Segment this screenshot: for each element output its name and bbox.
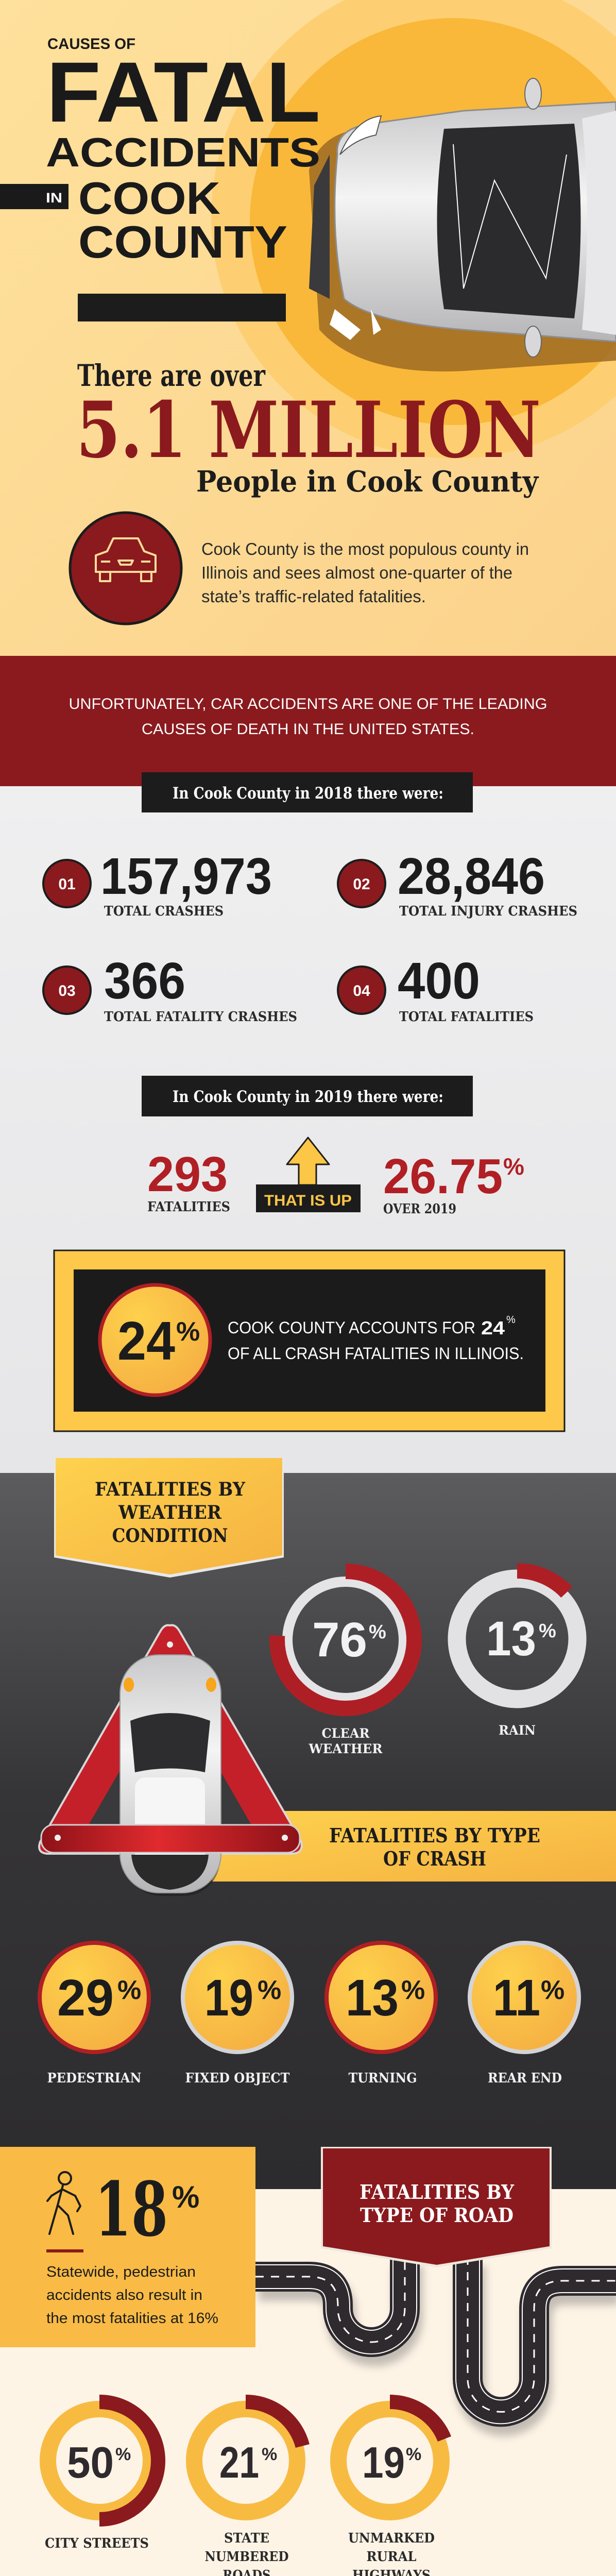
red banner: CAUSES OF DEATH IN THE UNITED STATES. xyxy=(142,721,474,738)
crash type: turning 13%: 13 xyxy=(346,1969,399,2027)
donut: state numbered roads 21%: STATE xyxy=(224,2531,269,2546)
donut: clear weather 76%: % xyxy=(369,1621,386,1643)
callout: 24% of Illinois fatalities: OF ALL CRASH FATALITIES IN ILLINOIS. xyxy=(228,1344,524,1363)
crash type: pedestrian 29% xyxy=(40,1943,149,2086)
crash type: turning 13%: TURNING xyxy=(348,2071,417,2086)
crash type: rear end 11%: % xyxy=(541,1975,564,2005)
crash type: rear end 11%: 11 xyxy=(493,1969,540,2027)
donut: city streets 50% xyxy=(45,2402,158,2551)
callout: 18% pedestrian: 18 xyxy=(95,2166,168,2253)
population headline xyxy=(76,358,541,499)
stat 03 xyxy=(43,952,297,1025)
donut: unmarked rural highways 19%: % xyxy=(406,2445,421,2464)
stat: 26.75%: % xyxy=(503,1153,524,1180)
road illustration xyxy=(255,2257,616,2421)
heading band: fatalities by type of crash xyxy=(212,1811,616,1882)
callout: 18% pedestrian: accidents also result in xyxy=(46,2287,202,2303)
heading: fatalities by type of road: FATALITIES BY xyxy=(360,2180,515,2204)
stat 01 xyxy=(43,848,272,919)
crash type: pedestrian 29%: % xyxy=(117,1975,141,2005)
heading: 2019 xyxy=(142,1076,473,1116)
red banner xyxy=(0,656,616,786)
stat 04 xyxy=(338,952,534,1025)
title: CAUSES OF xyxy=(47,36,135,53)
donut: state numbered roads 21%: NUMBERED xyxy=(205,2549,288,2565)
intro paragraph: Illinois and sees almost one-quarter of the xyxy=(201,563,512,582)
arrow: that is up: THAT IS UP xyxy=(264,1192,352,1209)
callout: 18% pedestrian: % xyxy=(172,2180,199,2214)
stat 04: 04 xyxy=(353,982,370,999)
sun circles xyxy=(211,0,616,459)
arrow: that is up xyxy=(256,1138,361,1212)
icon: car in circle xyxy=(70,513,181,624)
donut: clear weather 76%: WEATHER xyxy=(309,1741,383,1756)
donut: unmarked rural highways 19%: UNMARKED xyxy=(348,2531,435,2546)
cream background xyxy=(0,2189,616,2576)
stat 03: 03 xyxy=(58,982,76,999)
title: COOK xyxy=(78,173,220,224)
callout: 18% pedestrian xyxy=(0,2147,255,2347)
stat 03: 366 xyxy=(104,952,185,1010)
crash type: pedestrian 29%: 29 xyxy=(57,1969,114,2027)
stat 03: TOTAL FATALITY CRASHES xyxy=(104,1009,297,1025)
crash type: fixed object 19%: 19 xyxy=(204,1969,253,2027)
callout: 24% of Illinois fatalities: % xyxy=(506,1314,516,1326)
donut: city streets 50%: % xyxy=(115,2445,131,2464)
donut: state numbered roads 21%: % xyxy=(262,2445,277,2464)
stat 04: 400 xyxy=(398,952,480,1010)
heading: 2018 xyxy=(142,772,473,812)
title xyxy=(0,36,320,267)
callout: 24% of Illinois fatalities: 24 xyxy=(481,1317,505,1338)
callout: 24% of Illinois fatalities: % xyxy=(176,1317,200,1347)
callout: 24% of Illinois fatalities xyxy=(54,1250,564,1431)
donut: unmarked rural highways 19%: RURAL xyxy=(367,2549,416,2565)
donut: rain 13%: 13 xyxy=(486,1612,536,1666)
callout: 18% pedestrian: Statewide, pedestrian xyxy=(46,2264,196,2280)
heading: fatalities by weather condition xyxy=(54,1458,284,1578)
heading: fatalities by weather condition: WEATHER xyxy=(118,1502,222,1523)
callout: 24% of Illinois fatalities: COOK COUNTY ACCOUNTS FOR xyxy=(228,1318,475,1337)
donut: clear weather 76%: 76 xyxy=(312,1613,367,1667)
intro paragraph xyxy=(201,539,529,606)
crash type: rear end 11% xyxy=(470,1943,579,2086)
population headline: People in Cook County xyxy=(196,465,539,499)
title: ACCIDENTS xyxy=(46,129,320,175)
donut: city streets 50%: 50 xyxy=(67,2438,114,2487)
donut: clear weather 76% xyxy=(277,1571,414,1756)
stat 02 xyxy=(338,848,577,919)
illustration: crashed car xyxy=(309,78,616,371)
stat 02: 02 xyxy=(353,876,370,893)
heading band: fatalities by type of crash: FATALITIES BY TYPE xyxy=(329,1824,540,1847)
donut: unmarked rural highways 19% xyxy=(338,2402,444,2576)
stat: 26.75%: 26.75 xyxy=(383,1149,503,1204)
donut: state numbered roads 21% xyxy=(194,2402,302,2576)
illustration: warning triangle with car xyxy=(39,1625,302,1896)
crash type: turning 13% xyxy=(327,1943,436,2086)
heading: fatalities by type of road: TYPE OF ROAD xyxy=(360,2204,514,2227)
stat 01: 157,973 xyxy=(100,848,272,905)
donut: rain 13%: RAIN xyxy=(499,1723,536,1738)
heading: 2019: In Cook County in 2019 there were: xyxy=(173,1088,443,1106)
title: COUNTY xyxy=(78,216,287,267)
stat: 293 fatalities: 293 xyxy=(147,1147,228,1202)
icon: pedestrian xyxy=(47,2172,80,2234)
crash type: pedestrian 29%: PEDESTRIAN xyxy=(47,2071,141,2086)
callout: 24% of Illinois fatalities: 24 xyxy=(117,1311,175,1371)
donut: rain 13%: % xyxy=(539,1620,556,1642)
stat 04: TOTAL FATALITIES xyxy=(399,1009,534,1025)
dark background xyxy=(0,1473,616,2189)
heading: fatalities by weather condition: FATALITIES BY xyxy=(95,1479,246,1500)
stat: 26.75%: OVER 2019 xyxy=(383,1201,456,1217)
callout: 18% pedestrian: the most fatalities at 16% xyxy=(46,2310,218,2327)
donut: city streets 50%: CITY STREETS xyxy=(45,2536,149,2551)
heading: fatalities by weather condition: CONDITION xyxy=(112,1525,228,1547)
intro paragraph: state’s traffic-related fatalities. xyxy=(201,587,426,606)
population headline: There are over xyxy=(77,358,266,393)
crash type: fixed object 19%: % xyxy=(258,1975,281,2005)
crash type: turning 13%: % xyxy=(401,1975,425,2005)
donut: clear weather 76%: CLEAR xyxy=(321,1726,370,1741)
title: FATAL xyxy=(46,45,320,140)
stat 02: 28,846 xyxy=(398,848,545,905)
heading band: fatalities by type of crash: OF CRASH xyxy=(383,1847,486,1870)
donut: state numbered roads 21%: 21 xyxy=(219,2438,259,2487)
crash type: fixed object 19%: FIXED OBJECT xyxy=(185,2071,290,2086)
title: IN xyxy=(46,190,62,206)
header background xyxy=(0,0,616,656)
heading: 2018: In Cook County in 2018 there were: xyxy=(173,784,443,803)
donut: unmarked rural highways 19%: 19 xyxy=(362,2438,405,2487)
donut: rain 13% xyxy=(457,1571,577,1738)
heading: fatalities by type of road xyxy=(321,2147,552,2267)
gray stats background xyxy=(0,786,616,1473)
red banner: UNFORTUNATELY, CAR ACCIDENTS ARE ONE OF THE LEADING xyxy=(69,696,547,713)
stat 02: TOTAL INJURY CRASHES xyxy=(399,904,577,919)
stat 01: TOTAL CRASHES xyxy=(104,904,224,919)
crash type: rear end 11%: REAR END xyxy=(488,2071,562,2086)
stat 01: 01 xyxy=(58,876,76,893)
intro paragraph: Cook County is the most populous county in xyxy=(201,539,529,558)
stat: 293 fatalities: FATALITIES xyxy=(147,1199,230,1215)
crash type: fixed object 19% xyxy=(183,1943,292,2086)
